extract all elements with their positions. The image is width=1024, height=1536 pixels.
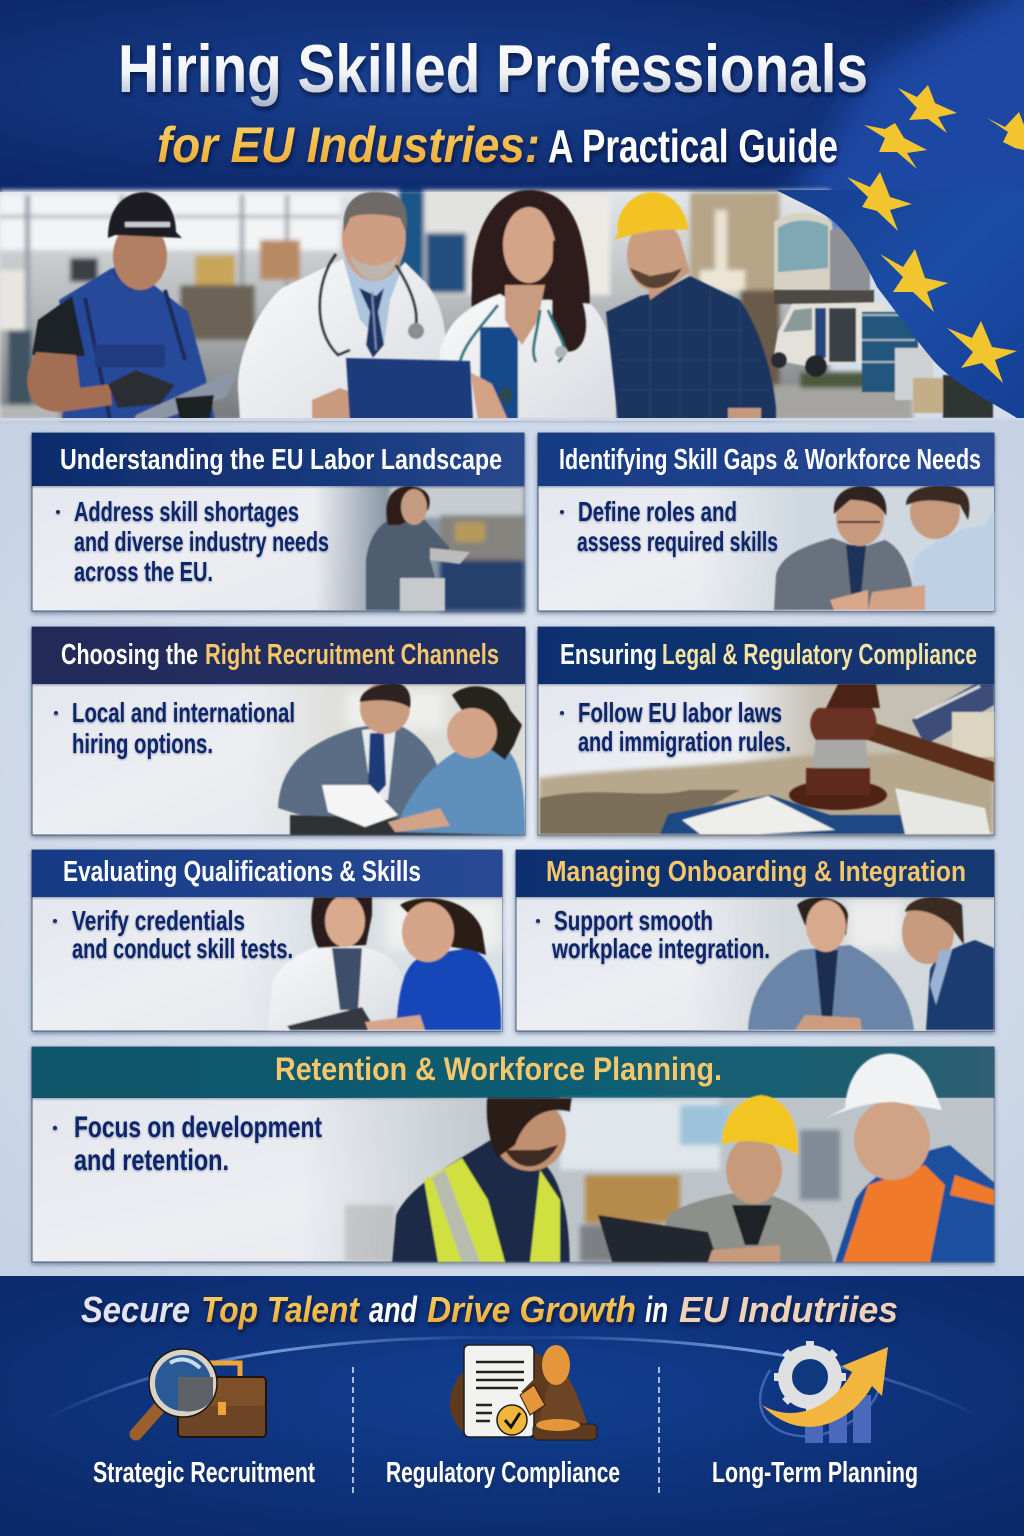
bullet text: and immigration rules. [578, 726, 791, 757]
bullet text [53, 905, 293, 964]
panel: Ensuring Legal and Regulatory Compliance [538, 627, 994, 835]
person: doctor with tie [238, 192, 447, 420]
panel: Choosing the Right Recruitment Channels [32, 627, 525, 835]
bullet text: and diverse industry needs [74, 526, 329, 557]
header bar [32, 1047, 994, 1098]
bullet text: assess required skills [577, 526, 778, 557]
label: Regulatory Compliance: Regulatory Compliance [386, 1457, 620, 1489]
building [774, 213, 832, 290]
bullet text [536, 905, 770, 964]
footer headline: Top Talent [201, 1289, 361, 1330]
icon: document with gavel and check [450, 1345, 597, 1440]
bullet text [53, 1111, 322, 1177]
footer headline: and [369, 1289, 418, 1330]
icon: gear, growth bars and arrow [760, 1341, 888, 1443]
bullet text [560, 496, 778, 557]
header bar [32, 850, 502, 897]
footer headline: EU Indutriies [679, 1289, 898, 1330]
EU flag with stars [776, 85, 1024, 420]
parked van [771, 302, 885, 377]
panel: Retention and Workforce Planning [32, 1047, 994, 1262]
footer headline: Secure [81, 1289, 190, 1330]
bullet text: Define roles and [578, 496, 737, 527]
header bar [32, 433, 524, 486]
bullet text: Verify credentials [72, 905, 245, 936]
bullet text: and conduct skill tests. [72, 933, 293, 964]
label: Long-Term Planning: Long-Term Planning [712, 1457, 918, 1489]
panel photo: recruiter and candidate [250, 682, 525, 835]
page background [0, 420, 1024, 1276]
footer headline: Drive Growth [427, 1289, 636, 1330]
header bar [32, 627, 525, 684]
footer band [0, 1276, 1024, 1536]
panel photo: new hire and manager [690, 897, 994, 1031]
header bar [538, 433, 994, 486]
header bar: Evaluating Qualifications & Skills [63, 856, 421, 888]
panel photo: two health workers with tablet [240, 895, 502, 1031]
bullet text: workplace integration. [551, 933, 770, 964]
footer headline: in [645, 1289, 668, 1330]
bullet text [54, 697, 295, 759]
blue folder [346, 358, 473, 420]
racks, crates and cabinet [862, 312, 993, 418]
divider [658, 1367, 660, 1497]
header bar: Choosing the [61, 639, 198, 671]
header bar: Understanding the EU Labor Landscape [60, 444, 502, 476]
header bar [538, 627, 994, 684]
bullet text: and retention. [74, 1144, 229, 1177]
divider [352, 1367, 354, 1497]
bullet text: across the EU. [74, 556, 213, 587]
header bar [516, 850, 994, 897]
header banner [0, 0, 1024, 230]
bullet text: Support smooth [554, 905, 713, 936]
label: Strategic Recruitment: Strategic Recruitment [93, 1457, 315, 1489]
bullet text: hiring options. [72, 728, 213, 759]
hero photo: professionals team [0, 85, 1024, 421]
panel: Identifying Skill Gaps and Workforce Needs [538, 433, 994, 611]
panel: Understanding the EU Labor Landscape [32, 433, 524, 611]
bullet text: Focus on development [74, 1111, 322, 1144]
header bar: Retention & Workforce Planning. [275, 1051, 722, 1087]
bullet text [560, 697, 791, 757]
panel photo: site workers in safety gear [300, 1054, 994, 1262]
header bar: Ensuring [560, 639, 657, 671]
person: doctor woman with long hair [438, 190, 616, 420]
panel photo: two men reviewing skills [700, 485, 994, 611]
footer headline [81, 1289, 898, 1330]
title: A Practical Guide [548, 120, 838, 172]
person: worker with black helmet [27, 192, 240, 420]
bullet text [56, 496, 329, 587]
person: man with yellow hard hat [606, 192, 776, 420]
icon: magnifier over briefcase [136, 1349, 266, 1437]
title: for EU Industries: [157, 117, 540, 173]
bullet text: Local and international [72, 697, 295, 728]
panel photo: gavel and legal documents [539, 684, 994, 834]
title: Hiring Skilled Professionals [118, 31, 868, 107]
panel: Managing Onboarding and Integration [516, 850, 994, 1031]
bullet text: Address skill shortages [74, 496, 299, 527]
bullet text: Follow EU labor laws [578, 697, 782, 728]
header bar: Right Recruitment Channels [205, 639, 499, 671]
factory background [0, 190, 920, 420]
panel: Evaluating Qualifications and Skills [32, 850, 502, 1031]
panel photo: factory operator [315, 486, 524, 611]
title [118, 31, 868, 173]
